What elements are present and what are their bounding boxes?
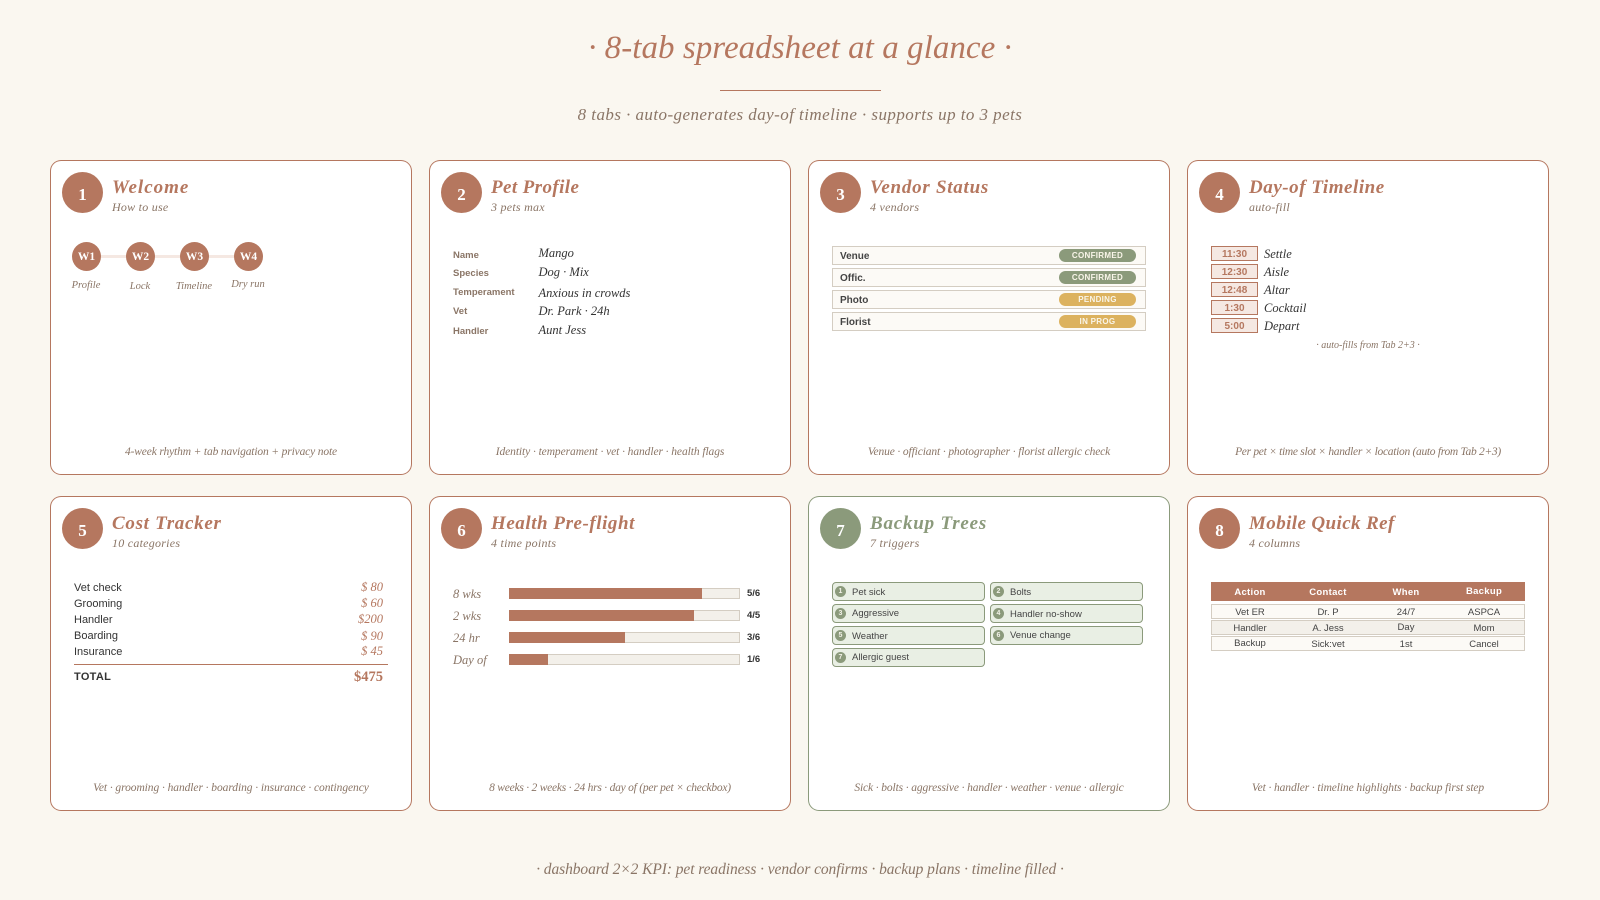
trigger chips: Allergic guest bbox=[852, 652, 909, 663]
timeline rows: 12:30 bbox=[1222, 267, 1247, 278]
bar chart bbox=[452, 587, 760, 667]
badge 4 bbox=[1199, 172, 1240, 213]
heading: Mobile Quick Ref: Mobile Quick Ref bbox=[1249, 513, 1395, 534]
quick reference table: Contact bbox=[1309, 587, 1347, 598]
footnote: Identity · temperament · vet · handler · health flags bbox=[496, 446, 724, 458]
auto-fill note: · auto-fills from Tab 2+3 · bbox=[1316, 340, 1420, 351]
heading: Backup Trees bbox=[870, 513, 987, 550]
profile fields: Species bbox=[453, 268, 489, 279]
heading: Health Pre-flight: 4 time points bbox=[491, 536, 556, 550]
heading: Pet Profile: Pet Profile bbox=[491, 177, 579, 198]
timeline rows: Settle bbox=[1264, 247, 1292, 261]
trigger chips: Weather bbox=[852, 631, 888, 642]
quick reference table: ASPCA bbox=[1468, 607, 1500, 618]
badge 2 bbox=[441, 172, 482, 213]
footnote: 4-week rhythm + tab navigation + privacy note bbox=[125, 446, 337, 458]
quick reference table: Cancel bbox=[1469, 639, 1499, 650]
vendor row: Officiant: Offic. bbox=[840, 273, 866, 284]
badge 3: 3 bbox=[836, 185, 845, 204]
bar chart: 4/5 bbox=[747, 610, 760, 621]
cost table bbox=[74, 580, 388, 685]
vendor row: Officiant bbox=[832, 268, 1146, 287]
vendor row: Florist: Florist bbox=[840, 317, 871, 328]
quick reference table: Sick:vet bbox=[1311, 639, 1345, 650]
heading: Health Pre-flight: Health Pre-flight bbox=[491, 513, 635, 534]
profile fields: Mango bbox=[538, 246, 574, 260]
badge 7 bbox=[820, 508, 861, 549]
profile fields: Dr. Park · 24h bbox=[538, 304, 610, 318]
footnote: Vet · handler · timeline highlights · backup first step bbox=[1252, 782, 1484, 794]
week timeline: W4 bbox=[240, 251, 257, 263]
heading: Day-of Timeline: auto-fill bbox=[1249, 200, 1290, 214]
heading: Cost Tracker: Cost Tracker bbox=[112, 513, 222, 534]
subtitle: 8 tabs · auto-generates day-of timeline · supports up to 3 pets bbox=[578, 105, 1022, 124]
footnote: Per pet × time slot × handler × location (auto from Tab 2+3) bbox=[1235, 446, 1501, 458]
panel: Cost Tracker bbox=[50, 496, 412, 811]
bar chart: 24 hr bbox=[453, 631, 480, 645]
vendor row: Photo bbox=[832, 290, 1146, 309]
heading: Welcome: Welcome bbox=[112, 177, 189, 198]
timeline rows bbox=[1211, 246, 1306, 333]
vendor row: Photo: Photo bbox=[840, 295, 868, 306]
heading: Backup Trees: 7 triggers bbox=[870, 536, 920, 550]
timeline rows: Altar bbox=[1264, 283, 1290, 297]
quick reference table: Dr. P bbox=[1317, 607, 1339, 618]
cost table: $ 90 bbox=[361, 628, 383, 642]
heading: Backup Trees: Backup Trees bbox=[870, 513, 987, 534]
profile fields bbox=[453, 246, 630, 337]
badge 1: 1 bbox=[78, 185, 87, 204]
cost table: $475 bbox=[354, 669, 383, 685]
heading: Cost Tracker bbox=[112, 513, 222, 550]
week timeline: Lock bbox=[130, 281, 150, 292]
week timeline bbox=[72, 242, 265, 292]
bar chart: 2 wks bbox=[453, 609, 481, 623]
week timeline: W1 bbox=[78, 251, 95, 263]
heading: Pet Profile bbox=[491, 177, 579, 214]
badge 8: 8 bbox=[1215, 521, 1224, 540]
timeline rows: 1:30 bbox=[1224, 303, 1244, 314]
trigger chips bbox=[832, 582, 1143, 667]
heading: Vendor Status bbox=[870, 177, 989, 214]
badge 5 bbox=[62, 508, 103, 549]
quick reference table: Backup bbox=[1466, 586, 1502, 597]
footnote: 8 weeks · 2 weeks · 24 hrs · day of (per pet × checkbox) bbox=[489, 782, 731, 794]
heading: Mobile Quick Ref: 4 columns bbox=[1249, 536, 1300, 550]
trigger chips: Bolts bbox=[1010, 586, 1031, 598]
trigger chips: Pet sick bbox=[852, 586, 885, 598]
vendor row: Florist: IN PROG bbox=[1080, 317, 1115, 326]
badge 3 bbox=[820, 172, 861, 213]
week timeline: Profile bbox=[72, 280, 100, 291]
panel: Health Pre-flight bbox=[429, 496, 791, 811]
badge 2: 2 bbox=[457, 185, 466, 204]
week timeline: W3 bbox=[186, 251, 203, 263]
badge 8 bbox=[1199, 508, 1240, 549]
heading: Mobile Quick Ref bbox=[1248, 513, 1396, 550]
vendor row: Photo: PENDING bbox=[1078, 295, 1117, 304]
profile fields: Dog · Mix bbox=[538, 265, 589, 279]
timeline rows: Aisle bbox=[1264, 265, 1289, 279]
profile fields: Vet bbox=[453, 306, 467, 317]
cost table: $ 45 bbox=[361, 644, 383, 658]
timeline rows: 5:00 bbox=[1224, 321, 1244, 332]
footnote: Venue · officiant · photographer · florist allergic check bbox=[868, 446, 1110, 458]
quick reference table: Handler bbox=[1233, 623, 1267, 634]
week timeline: W2 bbox=[132, 251, 149, 263]
heading: Day-of Timeline bbox=[1248, 177, 1385, 214]
title divider bbox=[720, 90, 881, 91]
profile fields: Name bbox=[453, 250, 479, 261]
bar chart: 8 wks bbox=[453, 587, 481, 601]
heading: Vendor Status: 4 vendors bbox=[870, 200, 919, 214]
profile fields: Temperament bbox=[453, 287, 515, 298]
quick reference table: Backup bbox=[1234, 638, 1266, 649]
heading: Day-of Timeline: Day-of Timeline bbox=[1249, 177, 1385, 198]
quick reference table: Action bbox=[1234, 587, 1266, 598]
timeline rows: Cocktail bbox=[1264, 301, 1306, 315]
quick reference table: Vet ER bbox=[1235, 607, 1265, 618]
heading: Vendor Status: Vendor Status bbox=[870, 177, 989, 198]
trigger chips: Venue change bbox=[1010, 630, 1071, 641]
quick reference table: A. Jess bbox=[1312, 623, 1344, 634]
trigger chips: 3 bbox=[839, 610, 842, 617]
quick reference table: When bbox=[1392, 587, 1420, 598]
quick reference table: 24/7 bbox=[1397, 607, 1415, 618]
badge 6 bbox=[441, 508, 482, 549]
badge 7: 7 bbox=[836, 521, 845, 540]
trigger chips: Handler no-show bbox=[1010, 609, 1082, 620]
quick reference table: Day bbox=[1398, 622, 1414, 633]
cost table: Handler bbox=[74, 614, 113, 626]
heading: Health Pre-flight bbox=[490, 513, 635, 550]
footnote: Vet · grooming · handler · boarding · insurance · contingency bbox=[93, 782, 369, 794]
panel: Mobile Quick Ref bbox=[1187, 496, 1549, 811]
trigger chips: 5 bbox=[839, 632, 842, 639]
trigger chips: Aggressive bbox=[852, 608, 899, 619]
panel: Welcome bbox=[50, 160, 412, 475]
trigger chips: 4 bbox=[997, 610, 1000, 617]
badge 1 bbox=[62, 172, 103, 213]
week timeline: Dry run bbox=[231, 279, 265, 290]
cost table: $200 bbox=[358, 612, 383, 626]
badge 6: 6 bbox=[457, 521, 466, 540]
trigger chips: 6 bbox=[997, 632, 1000, 639]
trigger chips: 7 bbox=[839, 654, 842, 661]
vendor row: Venue: CONFIRMED bbox=[1072, 251, 1123, 260]
heading: Welcome: How to use bbox=[112, 200, 168, 214]
timeline rows: 11:30 bbox=[1222, 249, 1247, 260]
bar chart: 5/6 bbox=[747, 588, 760, 599]
title: · 8-tab spreadsheet at a glance · bbox=[588, 30, 1012, 66]
timeline rows: 12:48 bbox=[1222, 285, 1247, 296]
panel: Pet Profile bbox=[429, 160, 791, 475]
cost table: $ 60 bbox=[361, 596, 383, 610]
cost table: Vet check bbox=[74, 582, 122, 594]
vendor row: Venue bbox=[832, 246, 1146, 265]
heading: Cost Tracker: 10 categories bbox=[112, 536, 180, 550]
profile fields: Aunt Jess bbox=[538, 323, 586, 337]
footer note: · dashboard 2×2 KPI: pet readiness · vendor confirms · backup plans · timeline filled · bbox=[536, 861, 1064, 878]
quick reference table: 1st bbox=[1400, 639, 1412, 650]
cost table: Boarding bbox=[74, 630, 118, 642]
badge 4: 4 bbox=[1215, 185, 1224, 204]
cost table: $ 80 bbox=[361, 580, 383, 594]
heading: Pet Profile: 3 pets max bbox=[491, 200, 545, 214]
profile fields: Anxious in crowds bbox=[538, 286, 630, 300]
vendor row: Florist bbox=[832, 312, 1146, 331]
timeline rows: Depart bbox=[1264, 319, 1299, 333]
panel: Day-of Timeline bbox=[1187, 160, 1549, 475]
trigger chips: 1 bbox=[839, 588, 842, 595]
cost table: TOTAL bbox=[74, 671, 111, 683]
bar chart: Day of bbox=[453, 653, 487, 667]
cost table: Grooming bbox=[74, 598, 122, 610]
trigger chips: 2 bbox=[997, 588, 1000, 595]
panel: Backup Trees bbox=[808, 496, 1170, 811]
vendor row: Officiant: CONFIRMED bbox=[1072, 273, 1123, 282]
bar chart: 3/6 bbox=[747, 632, 760, 643]
cost table: Insurance bbox=[74, 646, 122, 658]
week timeline: Timeline bbox=[176, 281, 212, 292]
quick reference table bbox=[1211, 582, 1525, 651]
bar chart: 1/6 bbox=[747, 654, 760, 665]
footnote: Sick · bolts · aggressive · handler · weather · venue · allergic bbox=[854, 782, 1124, 794]
quick reference table: Mom bbox=[1473, 623, 1495, 634]
vendor row: Venue: Venue bbox=[840, 251, 869, 262]
profile fields: Handler bbox=[453, 326, 488, 337]
badge 5: 5 bbox=[78, 521, 87, 540]
panel: Vendor Status bbox=[808, 160, 1170, 475]
heading: Welcome bbox=[112, 177, 189, 214]
